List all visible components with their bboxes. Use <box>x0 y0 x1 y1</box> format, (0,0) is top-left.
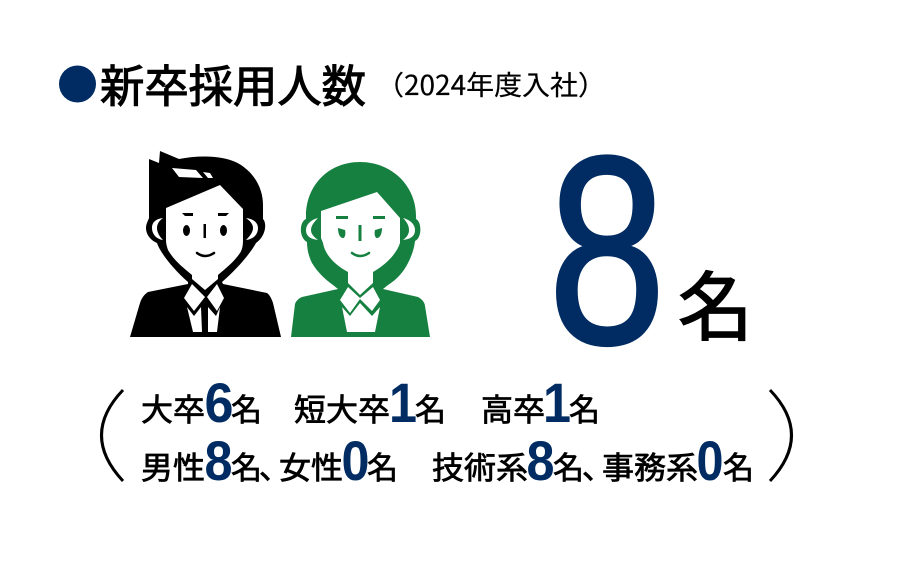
breakdown row 2 <box>141 429 754 492</box>
breakdown row 1: 1 <box>389 371 417 434</box>
breakdown row 2: 女性 <box>279 443 343 488</box>
big number 8: 8 <box>548 100 666 400</box>
left bracket <box>102 390 123 481</box>
breakdown row 1: 大卒 <box>141 385 205 430</box>
right bracket <box>770 390 792 481</box>
icon: male employee <box>130 151 281 337</box>
breakdown row 2: 名 <box>723 443 754 488</box>
breakdown row 2: 名 <box>367 443 398 488</box>
breakdown row 2: 名 <box>231 443 262 488</box>
breakdown row 2: 名 <box>553 443 584 488</box>
breakdown row 2: 8 <box>526 429 554 492</box>
total count <box>548 100 753 400</box>
breakdown row 2: 事務系 <box>602 443 698 488</box>
breakdown row 2: 技術系 <box>432 443 528 488</box>
breakdown row 2: 0 <box>696 429 724 492</box>
breakdown row 1: 1 <box>543 371 571 434</box>
unit: 名 <box>678 247 753 356</box>
icon: female employee <box>291 162 430 337</box>
breakdown row 1: 高卒 <box>481 385 545 430</box>
breakdown row 2: 8 <box>204 429 232 492</box>
breakdown row 1: 名 <box>415 385 446 430</box>
breakdown row 2: 、 <box>259 443 290 488</box>
breakdown row 1: 6 <box>204 371 234 434</box>
heading <box>59 50 366 115</box>
heading year note: （2024年度入社） <box>376 64 606 103</box>
breakdown row 1: 名 <box>231 385 262 430</box>
breakdown row 2: 0 <box>342 429 370 492</box>
heading title: 新卒採用人数 <box>100 50 366 115</box>
icon: heading bullet <box>59 66 96 102</box>
breakdown row 1: 名 <box>569 385 600 430</box>
breakdown row 2: 男性 <box>141 443 205 488</box>
breakdown row 2: 、 <box>582 443 613 488</box>
breakdown row 1: 短大卒 <box>294 385 390 430</box>
breakdown row 1 <box>141 371 600 434</box>
